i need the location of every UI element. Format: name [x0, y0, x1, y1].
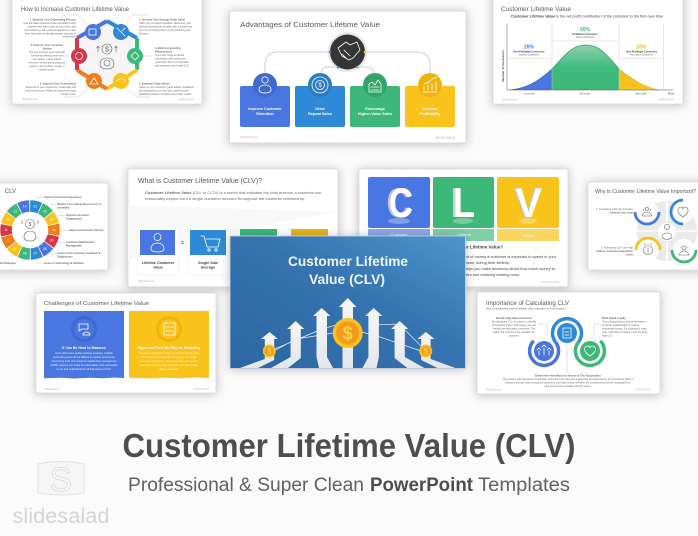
step 2 text: services.: [139, 32, 150, 36]
text: first point: revenue over time: [610, 210, 633, 214]
footer: SlideSalad.com: [486, 390, 502, 392]
slide title: Importance of Calculating CLV: [486, 301, 569, 307]
card: green metric: [240, 229, 277, 254]
text: identify high-value customers: higher the CLV, the more valuable the: [493, 331, 535, 334]
slide: advantages of CLV: [230, 11, 466, 143]
y axis label: Number of Customers: [501, 50, 505, 82]
low profit label: Non-Profitable Customers: [514, 50, 545, 54]
logo: slidesalad: S: [50, 461, 72, 499]
panel: hard to measure: (CRM) systems can make the information more accessible: [50, 363, 118, 367]
card: yellow metric: [291, 229, 328, 254]
wheel chart: 13: [13, 209, 17, 213]
panel: hard to measure: to our and understand for all their teams of CLV.: [57, 367, 112, 371]
tile: C customer: C: [386, 179, 410, 226]
wheel chart: 03: [50, 218, 54, 222]
subtitle: Templates: [478, 475, 570, 496]
card: single sale average: [188, 227, 229, 275]
large dollar coin: $: [343, 324, 353, 344]
slide: how to increase CLV: [12, 0, 202, 104]
text: determine how much to invest: Determine How Much to Invest in The Acquisition: [535, 374, 601, 378]
text: first point: [596, 207, 633, 214]
panel: hard to measure: [44, 311, 124, 378]
panel: high lead time: Customer acquisition value is a more accurate view: [139, 351, 199, 355]
step 6 text: chatbot policy.: [39, 68, 55, 72]
panel: hard to measure: If you don't have quality tracking systems, multiple: [55, 351, 113, 355]
wheel chart: 10: [7, 238, 10, 242]
panel: high lead time: High Lead Time Be Way for Marketing: [138, 346, 200, 350]
card: improve customer retention: [240, 73, 290, 127]
linked rings diagram: [530, 319, 604, 373]
text: identify high-value customers: Identify High-Value Customers: [496, 317, 533, 320]
footer: SlideSalad.com: [240, 135, 258, 139]
slide title: Challenges of Customer Lifetime Value: [44, 301, 149, 307]
step 4 text: [139, 82, 194, 96]
card: lifetime customer value: Lifetime Customer: [142, 261, 175, 265]
text: build brand loyalty: Build Brand Loyalty: [602, 317, 626, 320]
step 6 text: [28, 43, 66, 72]
subtitle: Customer Lifetime Value is the net profit contribution of the customer to the firm over time: [511, 14, 663, 18]
wheel labels: [0, 195, 104, 265]
wheel labels: Improved Customer Service: [69, 228, 104, 232]
tile: C customer: C: [389, 179, 413, 226]
profitable label: 60%: [580, 27, 591, 33]
slide: ways to improve CLV wheel: $: [29, 222, 32, 228]
step 5 text: resolve consumer Wants and requests using: [25, 88, 77, 92]
step 3 text: and increase your brand CLV.: [155, 64, 189, 68]
step 2 text: 2. Increase Your Average Order Value: [139, 18, 185, 22]
step 2 text: per unit, and lock prices on the products and: [139, 28, 191, 32]
card: drive repeat sales: Repeat Sales: [308, 112, 332, 116]
card: drive repeat sales: Drive: [315, 107, 325, 111]
wheel labels: Management: [66, 244, 82, 248]
card: lifetime customer value: [138, 227, 178, 275]
slide: CLV bell curve: slidesalad: [658, 98, 674, 102]
step 1 text: Use the data customers have provided to fully: [23, 21, 77, 25]
footer: SlideSalad.com: [22, 98, 39, 101]
high profit label: [626, 44, 658, 56]
subtitle: Why is calculating customer lifetime value important for your business: [486, 308, 567, 310]
panel: hard to measure: It Can Be Hard to Measure: [62, 346, 106, 350]
wheel labels: Customer Relationship: [66, 240, 95, 244]
explanation text: [396, 244, 557, 277]
slide: how to increase CLV: $: [105, 46, 109, 54]
step 3 text: If you can forge an actual: [155, 53, 185, 57]
hero title: Customer Lifetime: [288, 253, 408, 269]
step 4 text: and suggestions on how you could improve: [139, 88, 189, 92]
definition text: [145, 190, 321, 201]
card: improve customer retention: Improve Customer: [248, 107, 282, 111]
explanation text: This is an important metric as it helps you make decisions about how much money to: [409, 266, 555, 271]
main title: Customer Lifetime Value (CLV): [122, 428, 576, 465]
subtitle: Professional & Super Clean: [128, 475, 364, 496]
logo: slidesalad: [12, 461, 110, 528]
tile: L lifetime: L: [453, 179, 475, 226]
text: build brand loyalty: more with those consistent over the long-: [602, 331, 648, 334]
text: identify high-value customers: [492, 317, 537, 338]
card: drive repeat sales: [295, 73, 345, 127]
card: increase profitability: [405, 73, 455, 127]
explanation text: Customer lifetime value is the total amount of money a customer is expected to spend in your: [396, 254, 557, 259]
wheel labels: Suggestions: [57, 254, 73, 258]
x axis labels: Mid profile: [580, 92, 591, 96]
wheel chart: 09: [13, 247, 17, 251]
slide: why is CLV important: [588, 182, 698, 270]
step 3 text: Relationships: [155, 50, 173, 54]
step 5 text: contact tools.: [61, 92, 76, 96]
text: identify high-value customers: identify the high-value customers. The: [493, 328, 536, 330]
slide: importance of calculating CLV: slidesalad: [635, 388, 651, 392]
card: improve customer retention: Retention: [256, 112, 274, 116]
icon: dollar and hand: [22, 220, 38, 241]
connecting lines: [270, 322, 426, 351]
footer: SlideSalad.com: [44, 389, 60, 391]
step 4 text: Listen to your customer, good advice, feedback,: [139, 85, 194, 89]
node icons: [71, 24, 143, 89]
panel: high lead time: [129, 311, 209, 378]
small dollar coin left: [263, 344, 276, 358]
step 4 text: feedback process, to better serve their needs.: [139, 92, 192, 96]
high profit label: Very Profitable Customers: [626, 50, 658, 54]
tile: L lifetime: L: [450, 179, 472, 226]
step 1 text: experience.: [63, 34, 76, 38]
text: determine how much to invest: business can get, that of acquired customers and helps to learn whether the investment to sell are sustainable for: [505, 382, 631, 384]
step 3 text: you'll keep them coming back: [155, 60, 190, 64]
step 6 text: 6. Improve Your Customer: [31, 43, 63, 47]
text: build brand loyalty: [602, 317, 648, 338]
hexagon ring: [77, 21, 137, 89]
slide: C L V letters: [359, 169, 568, 287]
text: identify high-value customers: and valuing those most loyalty, you can: [492, 324, 536, 327]
wheel labels: Reduce your onboarding process to: [57, 202, 102, 206]
tile: L lifetime: [433, 177, 494, 241]
panel: hard to measure: processing tools and customer relationship management: [51, 359, 117, 363]
slide: challenges of CLV: [36, 293, 216, 393]
definition text: reasonably expect from a single customer account throughout the business relationship.: [145, 196, 305, 201]
low profit label: Inactive Customers: [519, 54, 540, 56]
subtitle: [128, 475, 570, 496]
central icon: handshake on dark circle: [328, 32, 368, 72]
wheel labels: Invest in Technology & Software: [44, 261, 84, 265]
wheel labels: Improve Customer: [66, 213, 89, 217]
step 3 text: connection with customers,: [155, 56, 187, 60]
step 1 text: 1. Optimize Your Onboarding Process: [30, 18, 77, 22]
wheel chart: 08: [23, 252, 27, 256]
profitable label: Profitable Customers: [572, 33, 598, 36]
rising arrows: [240, 298, 455, 368]
step 1 text: then follow up with email campaigns to make: [25, 28, 77, 32]
wheel chart: 01: [34, 205, 37, 209]
slide: how to increase CLV: slidesalad: [178, 98, 194, 102]
card: single sale average: Single Sale: [198, 261, 218, 265]
wheel chart: 05: [50, 238, 54, 242]
text: identify high-value customers: By calculating CLV, it's simple to identify: [492, 320, 537, 324]
card: encourage higher-value sales: Higher-Value Sales: [358, 112, 392, 116]
slide: advantages of CLV: slidesalad: [435, 135, 455, 140]
slide title: How to Increase Customer Lifetime Value: [21, 7, 130, 13]
petal diagram: [635, 200, 697, 262]
text: build brand loyalty: high CLV.: [602, 334, 613, 338]
wheel chart: 07: [34, 252, 37, 256]
step 3 text: [155, 46, 190, 68]
logo: slidesalad: slidesalad: [12, 505, 110, 528]
low profit label: 20%: [524, 44, 535, 50]
step 5 text: Respond to your customers' emails fast and: [26, 85, 77, 89]
card: single sale average: Average: [201, 266, 215, 270]
small dollar coin right: [419, 344, 432, 358]
text: determine how much to invest: The metrics CAC (Customer Acquisition Cost) and CLV represent a generally accepted Return On Investment (ROI) a: [503, 378, 634, 381]
bell curve chart: [507, 24, 673, 90]
tile: V value: [497, 177, 559, 241]
text: identify high-value customers: customer.: [509, 334, 520, 338]
panel: hard to measure: accounting tools can be difficult to monitor and ensure: [53, 355, 116, 359]
high profit label: 20%: [636, 44, 647, 50]
panel: high lead time: benefits can be limited. Retention can take a long: [141, 363, 198, 367]
step 6 text: service by offering real-time: [31, 54, 63, 58]
slide title: CLV: [5, 189, 16, 195]
text: second point: deliver customer acquisition: [597, 249, 633, 253]
slide title: What is Customer Lifetime Value (CLV)?: [138, 178, 262, 185]
card: encourage higher-value sales: [350, 73, 400, 127]
connector lines: [265, 52, 430, 74]
slide title: Advantages of Customer Lifetime Value: [240, 20, 380, 29]
text: second point: 2. Increasing CLV can help: [601, 246, 633, 250]
step 1 text: sure what they've already bought does go to: [25, 32, 77, 36]
wheel labels: assimilate: [57, 206, 70, 210]
text: determine how much to invest: [503, 374, 634, 388]
step 1 text: [23, 18, 77, 38]
card: increase profitability: Increase: [422, 107, 438, 111]
hero slide: customer lifetime value: [230, 236, 466, 368]
step 4 text: 4. Embrace Great Advice: [139, 82, 170, 86]
step 2 text: Offer your complete Facilities, discounts, and: [139, 21, 191, 25]
slide title: Why is Customer Lifetime Value Important?: [595, 189, 696, 195]
wheel labels: Engagement: [66, 216, 82, 220]
panel: high lead time: customer relationship, measuring the true long-term: [139, 359, 199, 363]
low profit label: [514, 44, 545, 56]
small dollar coin left: $: [267, 347, 272, 356]
step 1 text: process new sales tools at your store, and: [28, 24, 77, 28]
text: second point: costs: [626, 252, 633, 256]
card: drive repeat sales: $: [318, 83, 322, 89]
text: build brand loyalty: This is a good way to build afterwards to: [602, 320, 647, 324]
slide: challenges of CLV: slidesalad: [193, 387, 209, 391]
footer: SlideSalad.com: [502, 100, 518, 102]
small dollar coin right: $: [423, 347, 428, 356]
step 5 text: [25, 82, 77, 96]
panel: high lead time: time to measure.: [159, 367, 179, 371]
footer: SlideSalad.com: [138, 280, 155, 283]
card: increase profitability: Profitability: [420, 112, 441, 116]
step 3 text: 3. Build Long-lasting: [155, 46, 181, 50]
card: encourage higher-value sales: Encourage: [365, 107, 385, 111]
wheel chart: 04: [52, 228, 56, 232]
step 2 text: relevant products as bundle, with a lower price: [139, 24, 193, 28]
tile: V value: Value: [523, 233, 534, 238]
explanation text: What is Customer Lifetime Value?: [430, 244, 503, 250]
wheel labels: Listen to the Customer Feedback &: [57, 251, 101, 255]
profitable label: [572, 27, 598, 39]
step 6 text: live-videos, personalised: [33, 57, 62, 61]
slide: CLV bell curve: [493, 0, 683, 104]
definition text: Customer Lifetime Value (CLV or CLTV) is a metric that indicates the total revenue a business can: [145, 190, 321, 195]
hero title: Value (CLV): [309, 271, 385, 287]
equals sign: =: [181, 240, 184, 246]
text: first point: 1. Increasing CLV can increase: [596, 207, 633, 211]
x axis labels: [523, 92, 675, 96]
x axis labels: Low profile: [523, 92, 535, 96]
step 6 text: Service: [42, 46, 52, 50]
text: build brand loyalty: customer relationships by making: [602, 324, 640, 327]
profitable label: Active Customers: [576, 36, 595, 39]
tile: V value: V: [514, 179, 540, 226]
x axis labels: High profile: [635, 92, 648, 96]
tile: C customer: Customer: [390, 232, 408, 237]
footer: slidesalad: [541, 279, 559, 284]
explanation text: invest in acquiring new customers and retaining existing ones.: [413, 272, 520, 277]
text: build brand loyalty: businesses known. If a customer's costs: [602, 328, 647, 330]
step 6 text: You can improve your customer: [29, 50, 65, 54]
subtitle: PowerPoint: [370, 475, 474, 496]
explanation text: business, during their lifetime.: [459, 260, 510, 265]
wheel chart: 11: [4, 228, 8, 232]
step 6 text: support, and a phone, email, or: [29, 64, 65, 68]
step 2 text: [139, 18, 193, 36]
tile: V value: V: [515, 179, 542, 226]
text: determine how much to invest: their own business' health and their stores.: [544, 385, 592, 388]
center icon: dollar and hand: [96, 44, 118, 69]
large dollar coin: [333, 318, 363, 348]
panel: high lead time: when you're looking at the full picture of a single: [141, 355, 197, 359]
x axis labels: Time: [668, 92, 675, 96]
tile: L lifetime: Lifetime: [457, 232, 472, 237]
hero title: [288, 253, 408, 287]
wheel chart: 14: [23, 205, 27, 209]
card: lifetime customer value: Value: [153, 266, 163, 270]
high profit label: Very active Customers: [630, 54, 654, 56]
text: second point: [597, 246, 633, 256]
wheel labels: Improve Customer Experience: [44, 195, 82, 199]
slide: what is CLV: [128, 169, 338, 287]
wheel chart: 12: [7, 218, 10, 222]
slide: importance of calculating CLV: [477, 292, 660, 394]
tile: C customer: [368, 177, 430, 241]
slide title: Customer Lifetime Value: [501, 7, 572, 13]
wheel chart: [0, 196, 64, 264]
wheel chart: 02: [43, 209, 47, 213]
step 5 text: 5. Improve Easy Connections: [40, 82, 77, 86]
wheel chart: 06: [43, 247, 47, 251]
step 6 text: services, omnichannel customer: [28, 60, 66, 64]
slide: ways to improve CLV wheel: [0, 183, 108, 270]
